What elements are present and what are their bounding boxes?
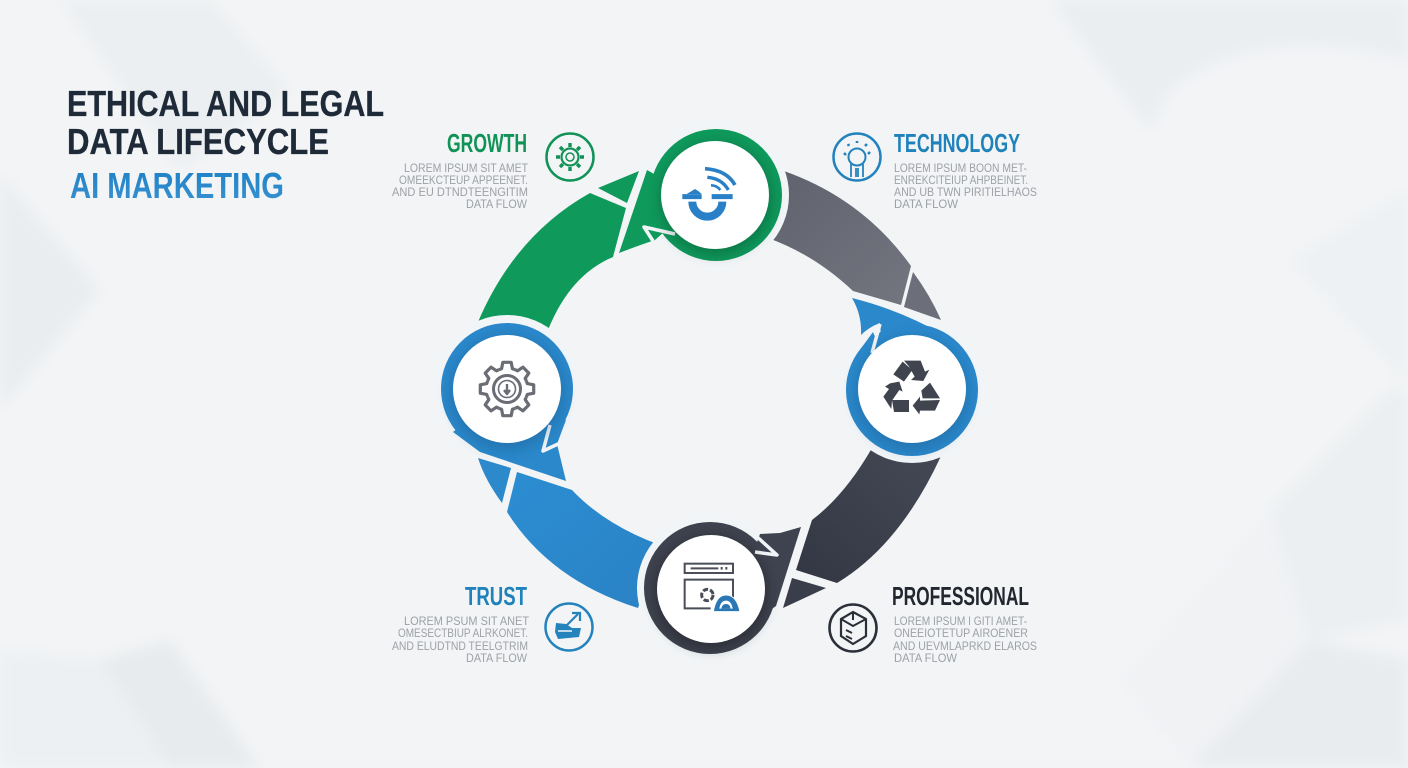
text block: technology: DATA FLOW bbox=[894, 197, 959, 211]
text block: professional bbox=[893, 614, 1037, 665]
text block: technology: AND UB TWN PIRITIELHAOS bbox=[894, 185, 1037, 199]
icon: recycle bbox=[883, 361, 940, 414]
segment: dark professional bbox=[783, 448, 941, 608]
text block: growth bbox=[392, 161, 529, 211]
icon: growth gear bbox=[546, 134, 594, 180]
text block: growth: DATA FLOW bbox=[466, 197, 528, 211]
node halos bbox=[433, 122, 985, 661]
panel: growth bbox=[392, 128, 594, 211]
panel: professional bbox=[830, 581, 1037, 665]
text block: trust: AND ELUDTND TEELGTRIM bbox=[392, 639, 528, 653]
node: right blue ring bbox=[846, 298, 978, 456]
icon: wifi dish bbox=[682, 169, 735, 217]
heading: professional: PROFESSIONAL bbox=[892, 581, 1029, 611]
title: DATA LIFECYCLE bbox=[67, 121, 329, 162]
text block: trust: LOREM PSUM SIT ANET bbox=[404, 614, 530, 628]
text block: trust bbox=[392, 614, 530, 665]
text block: technology bbox=[894, 161, 1037, 211]
segment: gray technology bbox=[768, 168, 941, 320]
heading: growth: GROWTH bbox=[447, 128, 527, 158]
heading: trust: TRUST bbox=[465, 581, 527, 611]
text block: professional: ONEEIOTETUP AIROENER bbox=[894, 626, 1028, 640]
text block: professional: LOREM IPSUM I GITI AMET- bbox=[894, 614, 1027, 628]
segment: blue trust bbox=[478, 458, 660, 608]
icon: technology lightbulb bbox=[834, 134, 880, 180]
text block: trust: DATA FLOW bbox=[466, 651, 528, 665]
title bbox=[67, 83, 384, 206]
text block: growth: LOREM IPSUM SIT AMET bbox=[404, 161, 529, 175]
title: AI MARKETING bbox=[70, 165, 284, 206]
text block: technology: ENREKCITEIUP AHPBEINET. bbox=[894, 173, 1028, 187]
icon: gear bbox=[480, 362, 534, 416]
text block: trust: OMESECTBIUP ALRKONET. bbox=[398, 626, 528, 640]
icon: trust handshake bbox=[546, 604, 592, 650]
text block: professional: DATA FLOW bbox=[894, 651, 958, 665]
text block: professional: AND UEVMLAPRKD ELAROS bbox=[893, 639, 1037, 653]
segment: green growth bbox=[478, 171, 639, 330]
text block: growth: OMEEKCTEUP APPEENET. bbox=[399, 173, 528, 187]
heading: technology: TECHNOLOGY bbox=[894, 128, 1020, 158]
title: ETHICAL AND LEGAL bbox=[67, 83, 384, 124]
node: bottom dark ring bbox=[644, 522, 801, 654]
node: top green ring bbox=[619, 129, 782, 261]
icon: browser window with lock bbox=[685, 564, 740, 612]
text block: technology: LOREM IPSUM BOON MET- bbox=[894, 161, 1027, 175]
text block: growth: AND EU DTNDTEENGITIM bbox=[392, 185, 528, 199]
icon: professional box bbox=[830, 604, 876, 652]
panel: trust bbox=[392, 581, 592, 665]
cycle diagram bbox=[433, 122, 985, 661]
node: left blue ring bbox=[441, 323, 573, 481]
panel: technology bbox=[834, 128, 1037, 211]
